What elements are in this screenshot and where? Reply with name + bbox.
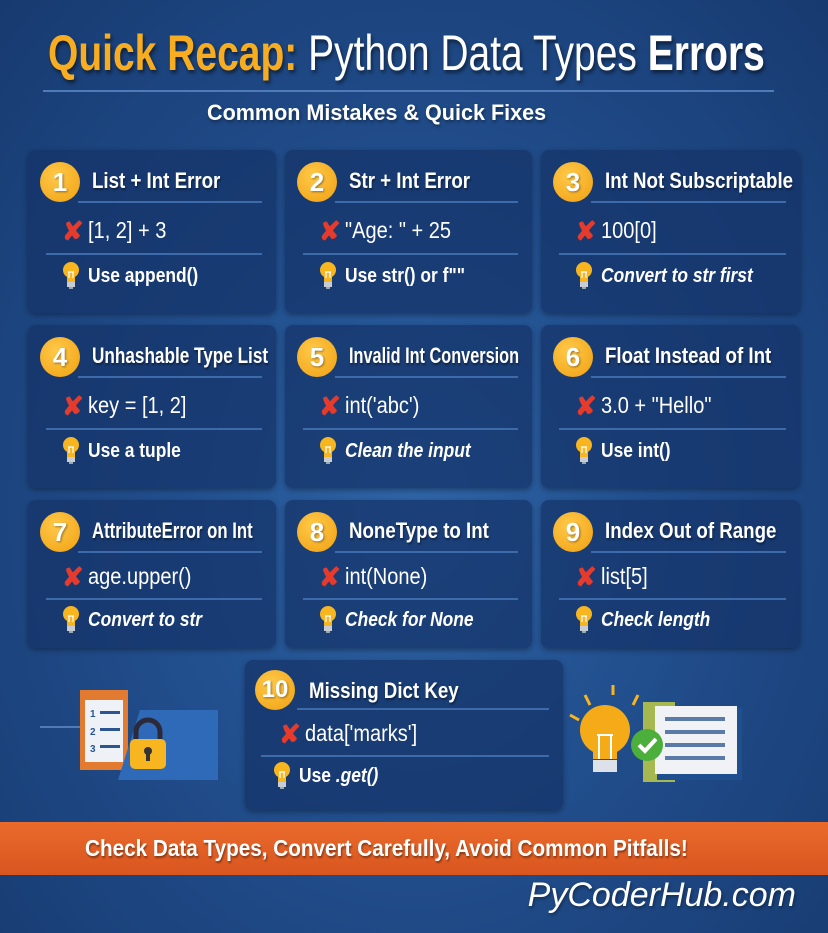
card 9: Check length <box>601 609 710 631</box>
card 6: ✘ <box>575 391 597 421</box>
card 3: 3 <box>566 167 580 197</box>
card 3: ✘ <box>575 216 597 246</box>
card 4: 4 <box>53 342 67 372</box>
banner: Check Data Types, Convert Carefully, Avoid Common Pitfalls! <box>85 835 688 861</box>
card 7: AttributeError on Int <box>92 518 253 543</box>
card 3: Convert to str first <box>601 265 753 287</box>
card 1: List + Int Error <box>92 168 220 193</box>
card 6: Use int() <box>601 440 671 462</box>
card 8: int(None) <box>345 563 427 589</box>
card 9: Index Out of Range <box>605 518 776 543</box>
card 6: 6 <box>566 342 580 372</box>
icon: document with lock: 3 <box>90 744 96 755</box>
card 8: 8 <box>310 517 324 547</box>
subtitle: Common Mistakes & Quick Fixes <box>207 100 546 125</box>
card 3 <box>541 150 800 313</box>
card 3: Int Not Subscriptable <box>605 168 793 193</box>
card 2: ✘ <box>319 216 341 246</box>
title: Quick Recap: Python Data Types Errors <box>48 25 765 81</box>
card 5 <box>285 325 532 488</box>
card 2: 2 <box>310 167 324 197</box>
card 8 <box>285 500 532 648</box>
card 10: 10 <box>262 676 288 703</box>
card 2: Str + Int Error <box>349 168 470 193</box>
card 7: 7 <box>53 517 67 547</box>
card 8: Check for None <box>345 609 474 631</box>
card 4: key = [1, 2] <box>88 392 186 418</box>
card 1: ✘ <box>62 216 84 246</box>
card 7: age.upper() <box>88 563 191 589</box>
card 7 <box>28 500 276 648</box>
card 5: int('abc') <box>345 392 419 418</box>
icon: document with lock: 2 <box>90 727 96 738</box>
card 6: 3.0 + "Hello" <box>601 392 711 418</box>
card 2: Use str() or f"" <box>345 265 465 287</box>
card 9: ✘ <box>575 562 597 592</box>
icon: document with lock <box>40 690 218 780</box>
card 5: ✘ <box>319 391 341 421</box>
card 5: 5 <box>310 342 324 372</box>
card 9: list[5] <box>601 563 648 589</box>
title underline <box>43 90 774 92</box>
card 6 <box>541 325 800 488</box>
card 1 <box>28 150 276 313</box>
icon: document with lock: 1 <box>90 709 96 720</box>
card 4: ✘ <box>62 391 84 421</box>
card 10: Use .get() <box>299 765 378 787</box>
card 4 <box>28 325 276 488</box>
card 4: Unhashable Type List <box>92 343 268 368</box>
card 1: 1 <box>53 167 67 197</box>
card 6: Float Instead of Int <box>605 343 771 368</box>
card 1: [1, 2] + 3 <box>88 217 166 243</box>
card 5: Invalid Int Conversion <box>349 343 519 368</box>
icon: bulb with checked document <box>569 685 742 782</box>
banner <box>0 822 828 875</box>
footer site name: PyCoderHub.com <box>528 876 796 914</box>
card 7: ✘ <box>62 562 84 592</box>
card 10: data['marks'] <box>305 720 417 746</box>
card 7: Convert to str <box>88 609 202 631</box>
card 3: 100[0] <box>601 217 656 243</box>
card 9: 9 <box>566 517 580 547</box>
card 5: Clean the input <box>345 440 471 462</box>
card 10 <box>245 660 563 810</box>
card 2 <box>285 150 532 313</box>
card 8: NoneType to Int <box>349 518 489 543</box>
card 9 <box>541 500 800 648</box>
card 10: ✘ <box>279 719 301 749</box>
card 2: "Age: " + 25 <box>345 217 451 243</box>
card 10: Missing Dict Key <box>309 678 459 703</box>
card 4: Use a tuple <box>88 440 181 462</box>
card 8: ✘ <box>319 562 341 592</box>
card 1: Use append() <box>88 265 198 287</box>
